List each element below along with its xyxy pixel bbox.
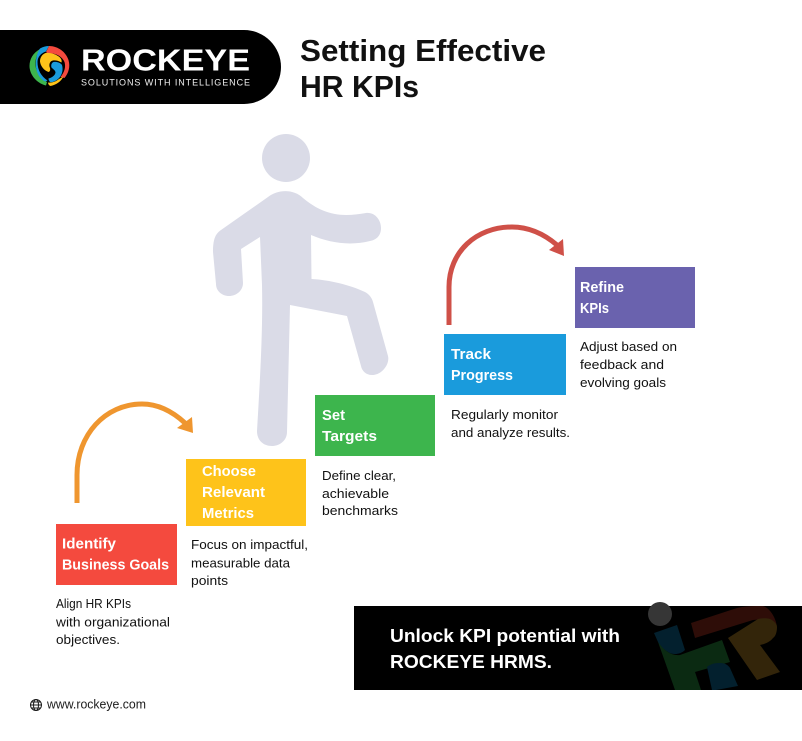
step 1: identify business goals: Business Goals [62, 558, 169, 574]
step 2 description [191, 538, 308, 588]
icon: faded HR mark [648, 602, 780, 690]
step 2: choose relevant metrics: Metrics [202, 506, 254, 522]
step 4 description [451, 408, 570, 440]
step 1 description: objectives. [56, 633, 120, 647]
step 3: set targets: Targets [322, 429, 377, 445]
arrow: red curved [449, 227, 564, 325]
callout banner: Unlock KPI potential with [390, 625, 620, 646]
logo wordmark: ROCKEYE [81, 42, 250, 78]
icon: rockeye swirl logo [30, 46, 69, 86]
title: HR KPIs [300, 69, 419, 104]
icon: climbing person [213, 134, 388, 446]
logo tagline: SOLUTIONS WITH INTELLIGENCE [81, 78, 250, 88]
step 4 description: and analyze results. [451, 426, 570, 440]
footer website: www.rockeye.com [46, 698, 146, 712]
logo banner [0, 30, 281, 104]
arrow: orange curved [77, 404, 193, 503]
step 1: identify business goals [55, 524, 177, 647]
callout banner [354, 602, 802, 690]
step 1: identify business goals: Identify [62, 536, 116, 552]
step 5: refine kpis: KPIs [580, 301, 609, 317]
step 1 description: with organizational [55, 616, 170, 630]
icon: globe [30, 700, 42, 710]
step 1 description [55, 597, 170, 647]
step 1 description: Align HR KPIs [56, 597, 131, 611]
step 5 description: feedback and [580, 358, 664, 372]
step 3 description: benchmarks [322, 504, 398, 518]
step 4: track progress: Track [451, 347, 492, 363]
step 3 description: achievable [322, 487, 389, 501]
step 5: refine kpis [575, 267, 695, 390]
title [300, 33, 546, 104]
step 3: set targets [315, 395, 435, 518]
step 3: set targets: Set [322, 408, 345, 424]
step 2: choose relevant metrics: Choose [202, 464, 256, 480]
step 4: track progress: Progress [451, 368, 513, 384]
title: Setting Effective [300, 33, 546, 68]
step 2 description: Focus on impactful, [191, 538, 308, 552]
step 5: refine kpis: Refine [580, 280, 624, 296]
callout banner: ROCKEYE HRMS. [390, 651, 552, 672]
step 4: track progress [444, 334, 570, 440]
step 3 description [322, 469, 398, 518]
step 5 description [580, 340, 677, 390]
step 2: choose relevant metrics [186, 459, 308, 588]
step 3 description: Define clear, [322, 469, 396, 483]
step 2: choose relevant metrics: Relevant [202, 485, 265, 501]
step 4 description: Regularly monitor [451, 408, 558, 422]
step 2 description: points [191, 574, 228, 588]
step 5 description: Adjust based on [580, 340, 677, 354]
step 5 description: evolving goals [580, 376, 666, 390]
step 2 description: measurable data [191, 556, 290, 570]
